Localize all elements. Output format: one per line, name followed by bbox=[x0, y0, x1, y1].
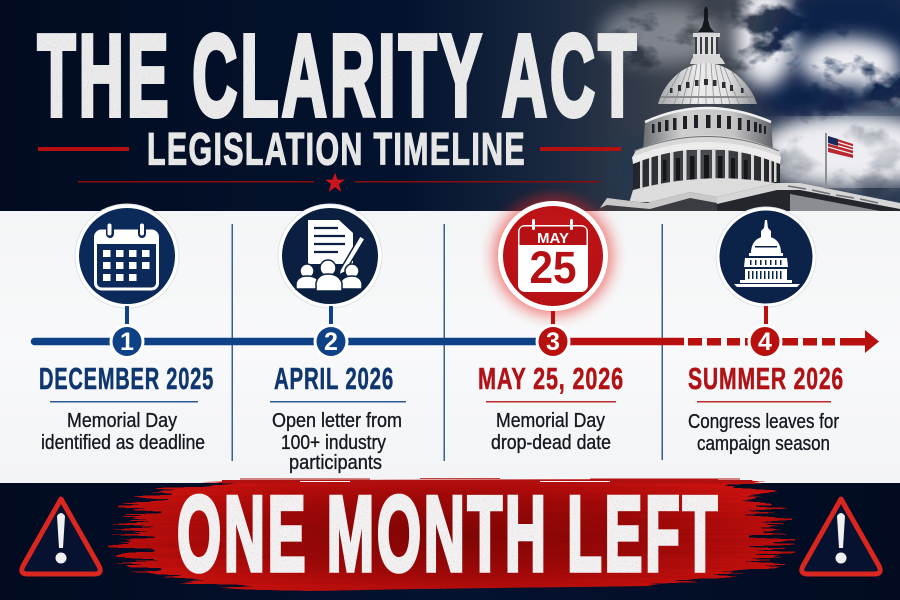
left wing of building bbox=[597, 192, 720, 211]
right wing of building bbox=[717, 183, 900, 211]
bottom band bbox=[0, 483, 900, 600]
step 2 description: Open letter from bbox=[272, 410, 402, 432]
step 1 description: identified as deadline bbox=[41, 432, 205, 454]
step 1 bbox=[39, 204, 214, 454]
step 3 date: MAY 25, 2026 bbox=[478, 361, 624, 396]
step 2 description bbox=[272, 410, 402, 474]
step 4 description bbox=[688, 411, 839, 455]
step 1 number bbox=[110, 324, 144, 359]
step 3 description: drop-dead date bbox=[491, 432, 611, 454]
header background bbox=[0, 0, 900, 212]
step 3 icon: May 25 calendar: MAY bbox=[537, 230, 569, 247]
people bbox=[296, 260, 362, 291]
star bbox=[325, 172, 345, 192]
drum base bbox=[630, 178, 781, 202]
step 4 description: campaign season bbox=[697, 433, 830, 455]
top edge streaks bbox=[222, 478, 752, 484]
subtitle ornaments bbox=[38, 147, 621, 192]
warning icon right bbox=[802, 499, 880, 574]
step 2 description: 100+ industry bbox=[281, 432, 386, 454]
step 4 description: Congress leaves for bbox=[688, 411, 839, 433]
step 3 description: Memorial Day bbox=[496, 410, 605, 432]
step 2 number: 2 bbox=[324, 328, 338, 356]
step 2 date: APRIL 2026 bbox=[274, 361, 394, 396]
step 3 bbox=[478, 196, 624, 454]
main dome bbox=[658, 63, 757, 104]
step 1 icon: calendar bbox=[75, 204, 179, 308]
step 3 icon: May 25 calendar: 25 bbox=[530, 242, 576, 293]
warning icon left bbox=[22, 499, 100, 574]
subtitle: LEGISLATION TIMELINE bbox=[147, 124, 526, 174]
step 2 description: participants bbox=[289, 452, 382, 474]
step 3 description bbox=[491, 410, 611, 454]
step 1 description: Memorial Day bbox=[67, 410, 177, 432]
step 4 icon: capitol bbox=[716, 207, 816, 307]
step 1 number: 1 bbox=[120, 328, 134, 356]
step 4 number bbox=[748, 324, 782, 359]
balustrade and cornice bbox=[632, 135, 781, 164]
step 1 date: DECEMBER 2025 bbox=[39, 361, 214, 396]
step 4 bbox=[688, 207, 844, 455]
step 1 description bbox=[41, 410, 205, 454]
statue and lantern bbox=[690, 6, 725, 64]
capitol building photo bbox=[597, 6, 900, 211]
step 2 number bbox=[314, 324, 348, 359]
step 2 icon: open letter and people bbox=[278, 204, 382, 308]
timeline panel bbox=[0, 211, 900, 483]
stormy sky with clouds bbox=[600, 0, 900, 200]
american flag bbox=[825, 133, 853, 189]
step 3 icon: May 25 calendar bbox=[493, 196, 613, 316]
step 3 number bbox=[536, 324, 570, 359]
step 3 number: 3 bbox=[546, 328, 560, 356]
column dividers bbox=[232, 224, 663, 461]
timeline line and arrow bbox=[34, 330, 879, 353]
upper drum bbox=[643, 108, 773, 150]
red brush stroke banner bbox=[131, 478, 773, 591]
colonnade bbox=[633, 147, 780, 192]
step 2 bbox=[270, 204, 406, 474]
step 4 number: 4 bbox=[758, 328, 772, 356]
